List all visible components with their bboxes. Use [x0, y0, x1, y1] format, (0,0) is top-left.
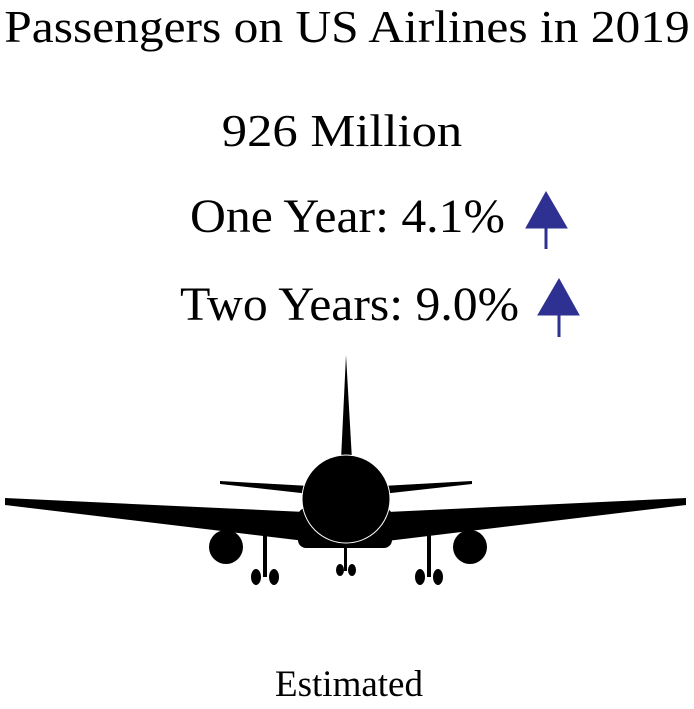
title: Passengers on US Airlines in 2019 — [4, 1, 690, 52]
footnote: Estimated — [275, 664, 423, 705]
icon: arrow one year — [526, 192, 567, 249]
icon: arrow two years — [538, 279, 579, 337]
two year growth: Two Years: 9.0% — [180, 278, 519, 331]
one year growth: One Year: 4.1% — [190, 190, 505, 243]
total passengers: 926 Million — [222, 105, 462, 156]
icon: airplane — [5, 355, 686, 585]
